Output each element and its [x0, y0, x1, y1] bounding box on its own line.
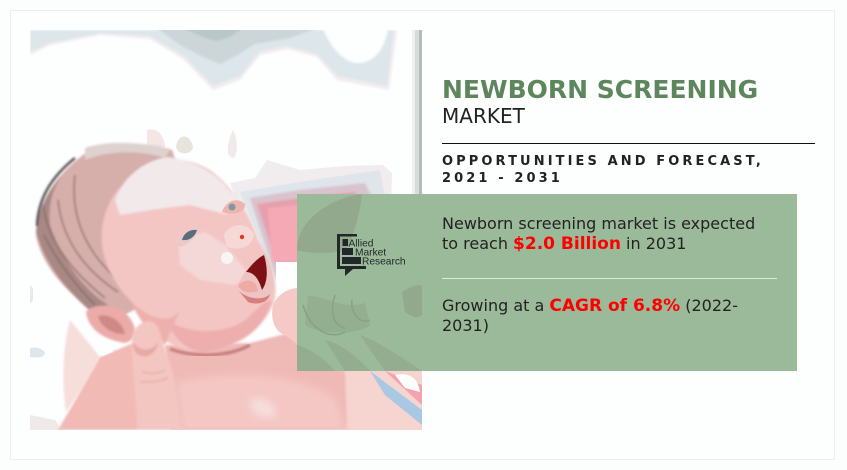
panel overlay: photo ghost shapes — [297, 194, 422, 371]
baby body — [165, 330, 347, 430]
text: CAGR: Growing at a CAGR of 6.8% (2022- — [442, 296, 738, 316]
logo: Allied Market Research — [337, 234, 406, 276]
baby ear — [86, 306, 135, 343]
divider line — [442, 143, 815, 144]
forecast heading — [442, 154, 764, 186]
background: right window strip — [412, 30, 422, 194]
logo: Allied Market Research: Research — [362, 256, 406, 268]
gap between hair and hand — [102, 351, 113, 356]
adult hand — [58, 321, 182, 430]
background: pink blanket — [30, 129, 422, 430]
forecast heading: 2021 - 2031 — [442, 171, 563, 186]
logo: Allied Market Research: Allied — [348, 238, 374, 250]
text: market size — [442, 214, 755, 254]
background: grey cloth at top — [30, 28, 397, 90]
baby head: hair — [36, 143, 179, 318]
title: NEWBORN SCREENING — [442, 75, 758, 104]
baby face: eyes, nose, mouth — [170, 200, 273, 355]
text: CAGR — [442, 296, 738, 335]
text: CAGR: 2031) — [442, 316, 489, 335]
panel divider — [442, 278, 777, 279]
baby head: face — [102, 157, 276, 352]
text: market size: to reach $2.0 Billion in 2031 — [442, 234, 686, 254]
subtitle: MARKET — [442, 104, 525, 128]
photo: newborn baby — [30, 30, 422, 430]
forecast heading: OPPORTUNITIES AND FORECAST, — [442, 154, 764, 169]
text: market size: Newborn screening market is expected — [442, 214, 755, 233]
logo: Allied Market Research: Market — [355, 248, 386, 258]
baby hand: small fingers — [272, 288, 298, 345]
adult arm — [63, 320, 100, 412]
panel: key statistics — [297, 194, 797, 371]
